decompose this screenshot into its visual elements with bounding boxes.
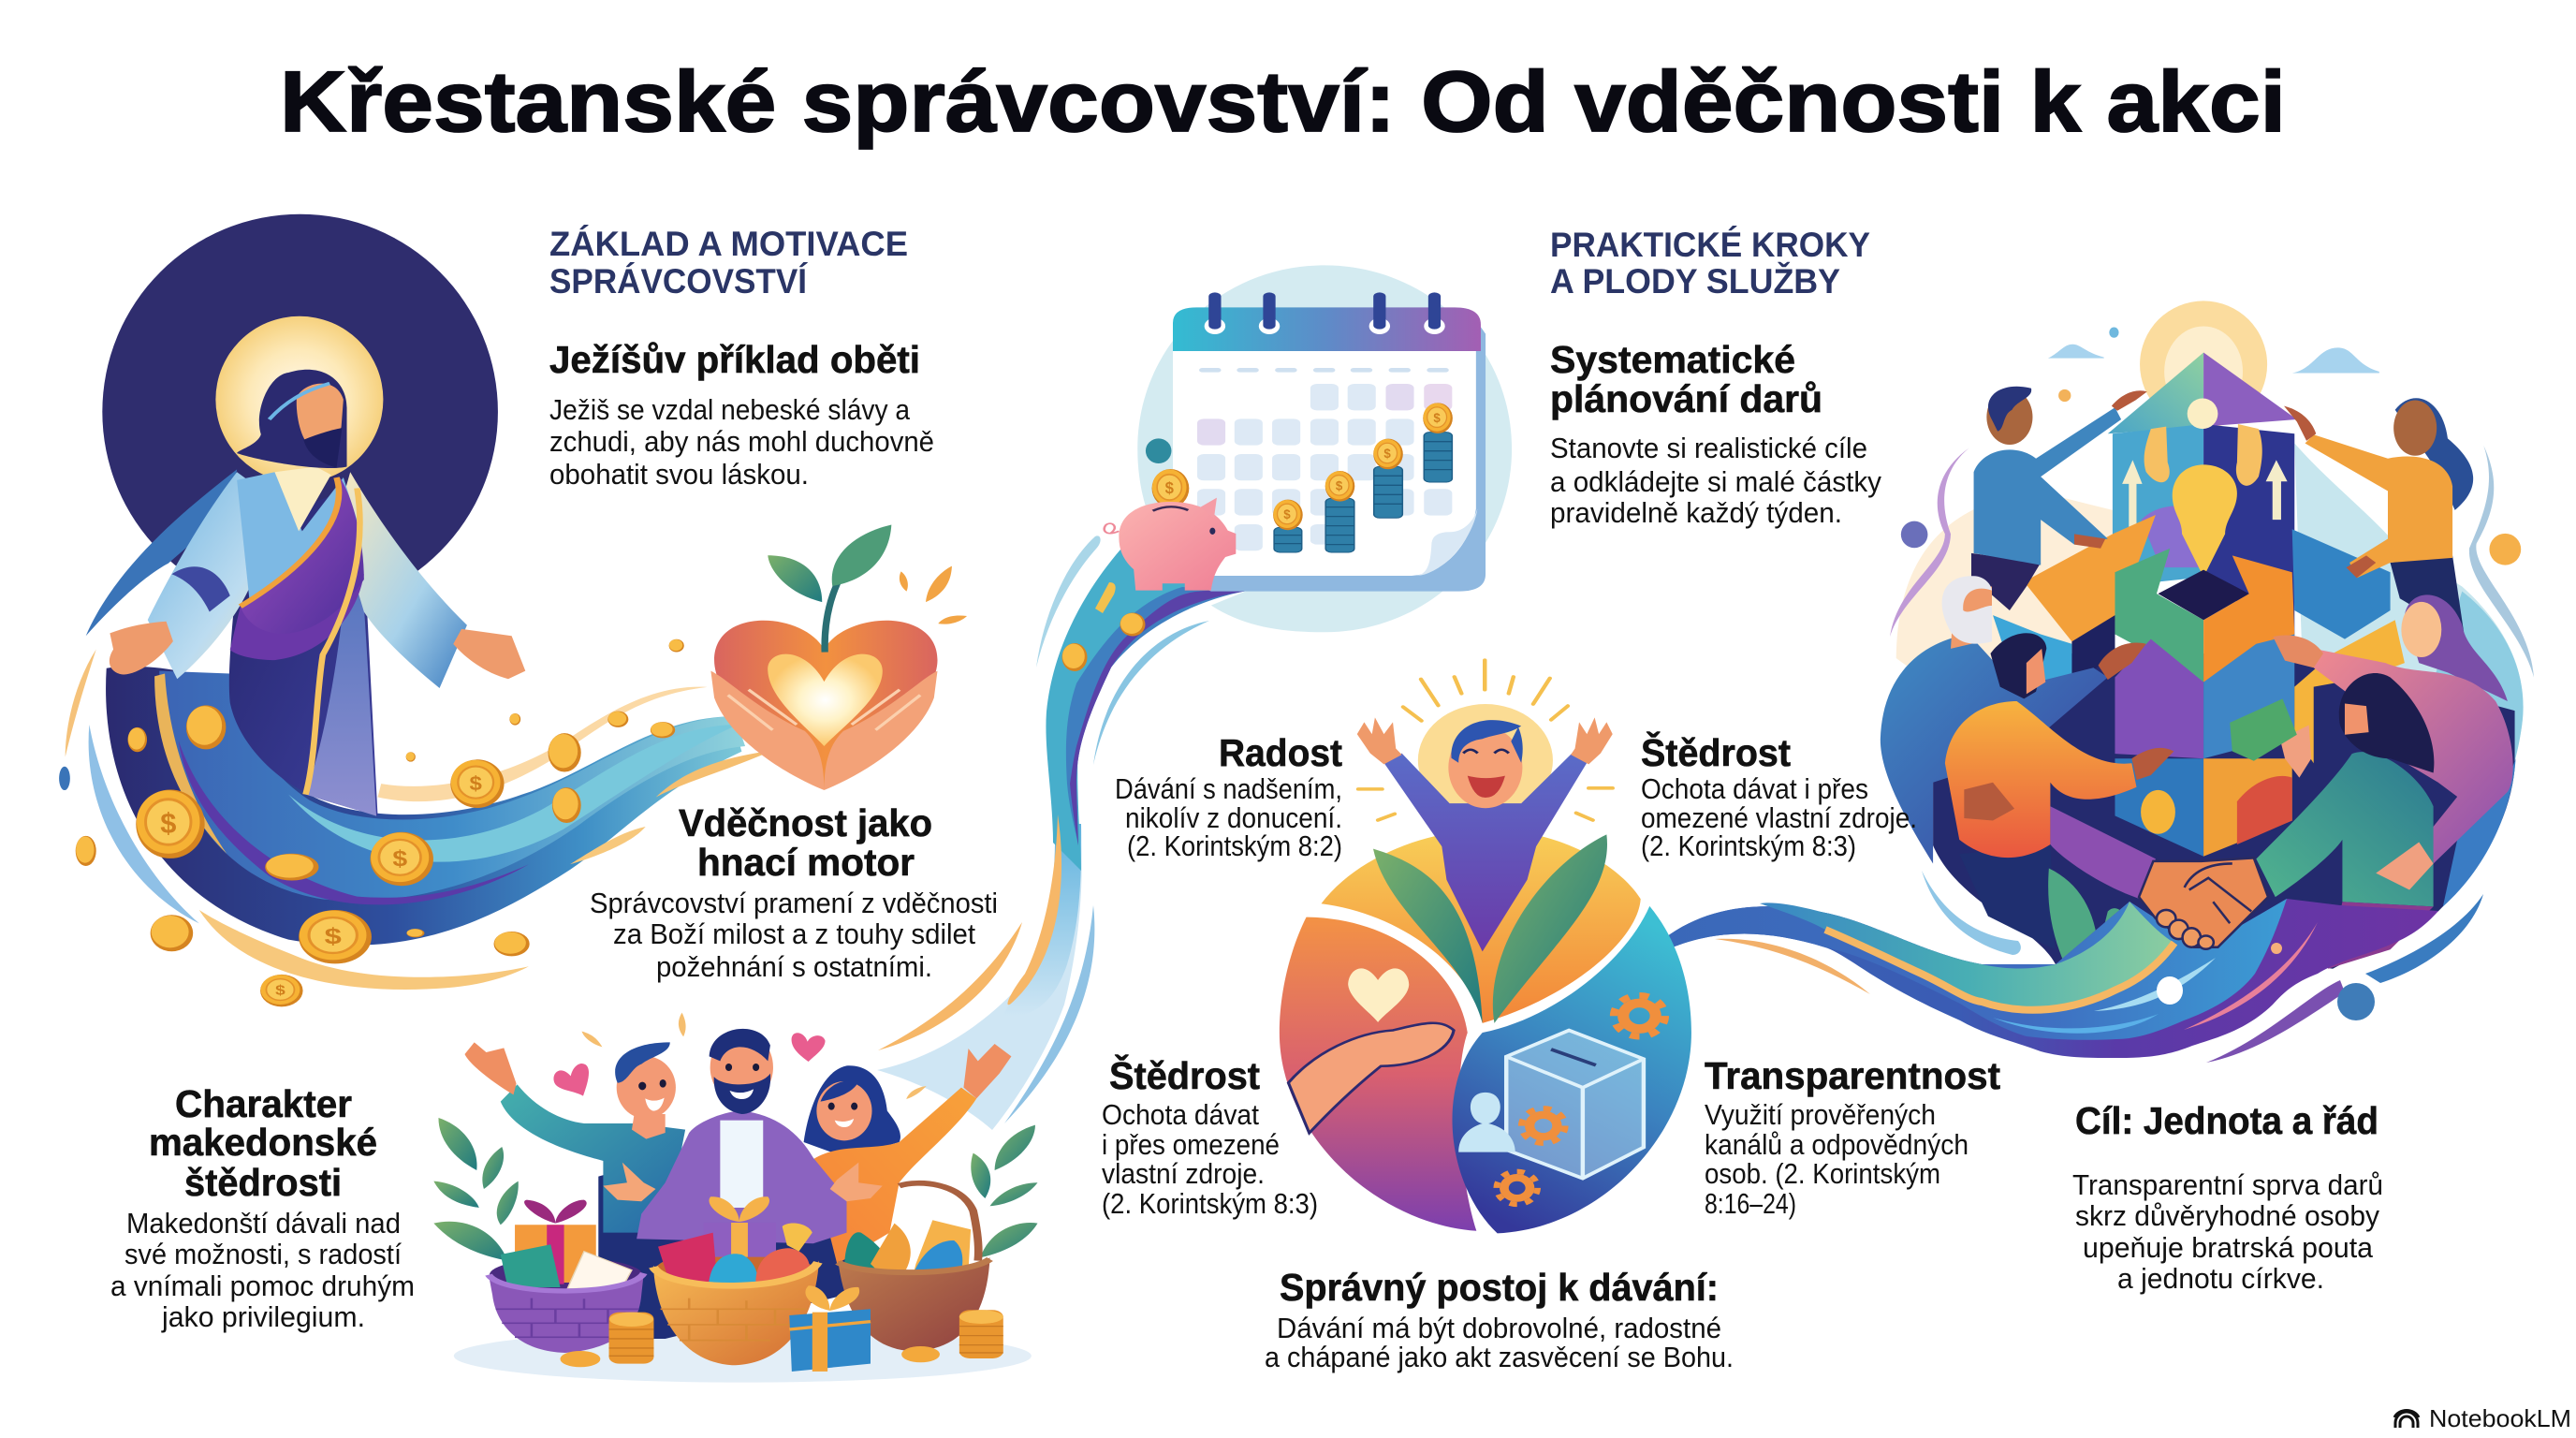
hands: [1357, 717, 1613, 764]
text: Radost: Dávání s nadšením,: [1115, 772, 1342, 805]
text: Charakter makedonské štědrosti: [110, 1082, 415, 1333]
pink streak: [2184, 922, 2318, 1030]
river purple band: [1070, 590, 1248, 845]
stack line details: [1274, 442, 1452, 545]
blue streak: [89, 725, 199, 923]
middle gifts: [658, 1196, 812, 1287]
blue right edge: [2443, 758, 2516, 906]
orange streak: [66, 650, 96, 756]
mouth: [1468, 776, 1505, 798]
river coin upper: [1120, 612, 1146, 637]
face: [297, 384, 344, 464]
left cupped hand: [710, 671, 824, 790]
text: section heading left: SPRÁVCOVSTVÍ: [549, 262, 809, 301]
small teal coin: [1146, 438, 1171, 463]
purple wave highlight: [179, 741, 529, 904]
open hand: [1288, 1023, 1454, 1133]
lower orange column: [2203, 758, 2292, 857]
small drop: [59, 767, 70, 790]
text: Vděčnost jako hnací motor: Správcovství pramení z vděčnosti: [590, 887, 998, 919]
person body: [1383, 754, 1587, 951]
illustration: central egg of attitudes: [1280, 660, 1691, 1233]
right basket gifts: [844, 1183, 978, 1273]
lower red block: [2237, 776, 2292, 844]
glass donation box: [1506, 1031, 1644, 1179]
calendar back page: [1173, 316, 1486, 592]
right basket rim: [838, 1259, 990, 1272]
left basket weave: [496, 1299, 639, 1337]
text: Cíl: Jednota a řád: Transparentní sprva darů: [2072, 1168, 2383, 1201]
finger lines: [728, 690, 920, 730]
left sleeve: [148, 472, 288, 679]
piggy bank: [1105, 498, 1236, 591]
coin stacks: [1274, 433, 1452, 552]
small decor: [2058, 389, 2071, 402]
person head: [1448, 727, 1522, 808]
text: Systematické plánování darů: Systematické: [1550, 338, 1795, 381]
blue block: [1993, 615, 2071, 687]
text: Správný postoj k dávání: Správný postoj k dávání:: [1280, 1266, 1719, 1309]
left basket gifts: [501, 1200, 632, 1289]
middle basket interior: [654, 1250, 814, 1294]
woman right: [804, 1044, 1011, 1264]
ground ellipse: [454, 1329, 1032, 1383]
text: Vděčnost jako hnací motor: požehnání s ostatními.: [656, 950, 932, 983]
hair highlight: [270, 384, 329, 419]
middle basket: [653, 1261, 819, 1365]
text: Štědrost right: omezené vlastní zdroje.: [1641, 801, 1917, 834]
teal backdrop lower: [2423, 592, 2524, 863]
eyes: [1463, 750, 1509, 754]
text: Cíl: Jednota a řád: skrz důvěryhodné osoby: [2075, 1199, 2379, 1232]
text: Charakter makedonské štědrosti: Makedonští dávali nad: [126, 1207, 401, 1240]
small orange dot: [2271, 943, 2282, 954]
blue cube face: [2203, 635, 2294, 758]
text: Transparentnost: osob. (2. Korintským: [1705, 1157, 1940, 1190]
left hand: [110, 622, 173, 674]
thin orange streak: [1715, 939, 1870, 994]
light heart: [1348, 968, 1409, 1022]
text: Charakter makedonské štědrosti: jako privilegium.: [161, 1300, 365, 1333]
text: Charakter makedonské štědrosti: své možnosti, s radostí: [124, 1238, 402, 1270]
text: Systematické plánování darů: pravidelně každý týden.: [1550, 496, 1842, 529]
text: Správný postoj k dávání: [1265, 1266, 1734, 1373]
tower glow: [2142, 506, 2203, 567]
connector teal-green layer: [1760, 902, 2174, 1010]
illustration: heart in hands with sprout: [710, 524, 967, 790]
clouds: [2048, 345, 2379, 373]
text: Vděčnost jako hnací motor: [590, 801, 998, 983]
calendar day cells: [1197, 384, 1452, 550]
text: Ježíšův příklad oběti: obohatit svou láskou.: [549, 458, 809, 491]
river outer lower streak: [1004, 905, 1094, 1123]
flowing navy wave: [106, 667, 741, 946]
inner heart: [768, 654, 883, 746]
text: Správný postoj k dávání: Dávání má být dobrovolné, radostné: [1277, 1312, 1721, 1344]
illustration: calendar with coin stacks and piggy bank: [1105, 265, 1512, 632]
text: Cíl: Jednota a řád: upeňuje bratrská pouta: [2083, 1231, 2374, 1264]
left plant: [433, 1118, 519, 1261]
stem: [825, 575, 842, 653]
gold ribbon right: [656, 751, 772, 797]
binder rings: [1205, 292, 1445, 334]
peach backdrop: [1896, 491, 2113, 711]
sash stripe: [241, 477, 339, 607]
central river ribbon: [877, 536, 1248, 1130]
calendar header: [1173, 307, 1481, 351]
right leaf: [1493, 834, 1607, 1023]
orange block side: [2071, 615, 2115, 687]
coin in column: [2141, 790, 2175, 834]
text: Vděčnost jako hnací motor: Vděčnost jako: [679, 801, 932, 844]
speech bubble left: [1901, 521, 1927, 548]
person top-right: [2284, 398, 2473, 637]
left basket: [489, 1273, 644, 1353]
sun halo: [1418, 704, 1553, 816]
petals: [900, 566, 967, 624]
orange puzzle piece: [2203, 555, 2294, 682]
person elder left: [1881, 576, 2146, 863]
connector orange line: [1825, 930, 2174, 1010]
calendar paper: [1173, 349, 1476, 576]
gold ribbon lower: [199, 910, 529, 990]
sleeve fold: [171, 566, 230, 611]
text: Transparentnost: Transparentnost: [1705, 1054, 2000, 1097]
purple forearm: [2050, 806, 2156, 900]
lower blue column: [2115, 758, 2203, 857]
text: Ježíšův příklad oběti: Ježiš se vzdal nebeské slávy a: [549, 393, 911, 426]
right cupped hand: [824, 671, 938, 790]
text: Štědrost left: vlastní zdroje.: [1102, 1157, 1265, 1190]
dark lower bodies: [598, 1158, 846, 1339]
text: Charakter makedonské štědrosti: makedonské: [149, 1121, 377, 1164]
roof right: [2203, 353, 2297, 427]
orange strip in river: [1007, 814, 1061, 1005]
person icon: [1458, 1093, 1515, 1152]
text: Transparentnost: 8:16–24): [1705, 1187, 1796, 1220]
text: section heading right: PRAKTICKÉ KROKY: [1550, 226, 1870, 264]
connector purple outer: [1634, 899, 2438, 1058]
connector blue layer: [1634, 899, 2287, 1040]
sun: [2140, 301, 2267, 428]
blue highlight: [1993, 1014, 2159, 1034]
left basket interior: [490, 1257, 642, 1292]
text: Systematické plánování darů: Stanovte si realistické cíle: [1550, 432, 1867, 464]
pale circle backdrop: [1137, 265, 1512, 632]
text: Systematické plánování darů: [1550, 338, 1881, 529]
person top-left: [1971, 387, 2147, 610]
cyan layer of wave: [288, 725, 739, 862]
text: Transparentnost: kanálů a odpovědných: [1705, 1128, 1969, 1161]
text: Cíl: Jednota a řád: Cíl: Jednota a řád: [2075, 1099, 2378, 1142]
blue cape streak: [86, 469, 237, 636]
text: Ježíšův příklad oběti: Ježíšův příklad oběti: [549, 338, 920, 381]
arrows: [2122, 460, 2288, 529]
tower right: [2203, 424, 2294, 644]
gears: [1497, 995, 1665, 1204]
text: Transparentnost: [1705, 1054, 2000, 1220]
left leaf: [1373, 849, 1483, 1023]
light streak: [1922, 871, 2021, 955]
right sleeve: [337, 472, 467, 688]
text: Správný postoj k dávání: a chápané jako akt zasvěcení se Bohu.: [1265, 1341, 1734, 1373]
purple cube face: [2115, 639, 2203, 758]
right hand: [453, 629, 525, 679]
plant: [2048, 869, 2131, 964]
halo: [215, 316, 383, 483]
text: Štědrost left: Ochota dávat: [1102, 1098, 1259, 1131]
blue gift box: [789, 1285, 871, 1372]
river mid blue: [1003, 824, 1081, 1017]
weekday dashes: [1199, 368, 1449, 373]
green puzzle piece: [2115, 549, 2203, 682]
mid blue layer of wave: [159, 671, 745, 901]
thumb: [2185, 863, 2251, 923]
page curl: [1416, 508, 1477, 576]
icon: NotebookLM logo: [2394, 1410, 2419, 1428]
text: Štědrost left: [1102, 1054, 1318, 1220]
beard: [303, 428, 342, 468]
right plant: [971, 1125, 1037, 1257]
text: Ježíšův příklad oběti: zchudi, aby nás mohl duchovně: [549, 425, 934, 458]
coin stacks: [560, 1310, 1003, 1367]
left basket rim and bricks: [489, 1273, 644, 1291]
text: Štědrost left: Štědrost: [1109, 1054, 1260, 1097]
man left: [464, 1042, 685, 1233]
orb: [2188, 399, 2217, 429]
bulb: [2173, 464, 2237, 577]
pale teal backdrop: [2294, 443, 2524, 873]
person pink: [2273, 594, 2513, 863]
river teal band: [1046, 550, 1248, 871]
text: Radost: [1115, 731, 1342, 862]
river outer left streak: [1036, 536, 1101, 668]
text: Systematické plánování darů: a odkládejte si malé částky: [1550, 465, 1881, 498]
right edge streak: [2365, 894, 2483, 983]
text: Systematické plánování darů: plánování darů: [1550, 377, 1822, 420]
text: section heading left: ZÁKLAD A MOTIVACE: [549, 225, 908, 263]
title: Křestanské správcovství: Od vděčnosti k akci: [280, 54, 2286, 150]
hair: [237, 370, 347, 468]
right blue block: [2292, 529, 2391, 639]
text: Štědrost left: i přes omezené: [1102, 1128, 1280, 1161]
text: Cíl: Jednota a řád: a jednotu církve.: [2117, 1262, 2324, 1295]
text: Štědrost right: Ochota dávat i přes: [1641, 772, 1868, 805]
text: Štědrost right: Štědrost: [1641, 731, 1791, 774]
text: Charakter makedonské štědrosti: Charakter: [175, 1082, 352, 1125]
tower left: [2113, 424, 2203, 587]
left segment: [1280, 917, 1476, 1231]
roof left: [2108, 353, 2203, 433]
swirl left: [1890, 448, 1969, 637]
middle basket rim: [653, 1262, 818, 1285]
top orange segment: [1321, 829, 1641, 1023]
text: Radost: (2. Korintským 8:2): [1127, 829, 1342, 862]
river coin gold dash: [1095, 582, 1116, 613]
river coin: [1061, 643, 1088, 671]
illustration: generous people with baskets: [433, 1013, 1038, 1383]
dark navy circle behind figure: [102, 214, 498, 609]
orange coins on stacks: [1152, 403, 1453, 530]
text: Charakter makedonské štědrosti: a vnímali pomoc druhým: [110, 1269, 415, 1302]
sun core: [2164, 326, 2243, 417]
purple sash: [241, 477, 364, 634]
navy base mass: [1933, 653, 2515, 969]
decorative dots: [581, 1013, 927, 1099]
text: Cíl: Jednota a řád: [2072, 1099, 2383, 1295]
money: [2230, 698, 2297, 761]
text: Ježíšův příklad oběti: [549, 338, 934, 491]
right basket: [838, 1257, 990, 1351]
left leaf: [768, 555, 822, 602]
person teal: [2256, 673, 2434, 969]
middle basket weave: [661, 1299, 806, 1341]
robe column: [305, 488, 376, 816]
wrench hands: [2144, 424, 2262, 486]
chest robe: [237, 472, 358, 611]
person hair: [1451, 720, 1523, 763]
river inner right streak: [1093, 621, 1209, 765]
hands: [2139, 858, 2268, 947]
text: Štědrost left: (2. Korintským 8:3): [1102, 1187, 1318, 1220]
white dot: [2157, 976, 2183, 1005]
connector wave to right illustration: [1634, 871, 2483, 1063]
river blue band: [1066, 587, 1248, 845]
ball tail: [2206, 980, 2345, 1063]
orange block: [2024, 515, 2156, 641]
text: Transparentnost: Využití prověřených: [1705, 1098, 1936, 1131]
center man: [603, 1029, 883, 1243]
text: Radost: Radost: [1219, 731, 1342, 774]
pale highlight: [2094, 958, 2216, 1011]
thin orange arc: [878, 922, 1022, 1050]
fingers: [2157, 910, 2214, 949]
gold stripe in wave: [154, 673, 227, 854]
right yellow block: [2294, 620, 2405, 763]
right leaf: [832, 524, 891, 586]
river pale body: [877, 843, 1082, 1130]
sash gold edge: [305, 488, 359, 795]
text: section heading left: [549, 225, 908, 301]
person orange shirt: [1945, 633, 2174, 949]
heart: [714, 621, 938, 789]
figure lower robe: [229, 488, 378, 816]
hearts: [553, 1033, 826, 1096]
illustration: people building together: [1881, 301, 2534, 969]
text: Štědrost right: (2. Korintským 8:3): [1641, 829, 1856, 862]
right segment: [1452, 906, 1691, 1233]
text: section heading right: [1550, 226, 1870, 301]
purple fold: [230, 574, 364, 660]
text: Vděčnost jako hnací motor: za Boží milost a z touhy sdilet: [613, 917, 975, 950]
gold ribbon near text: [570, 827, 646, 864]
cream collar: [274, 466, 331, 531]
coins: [76, 639, 684, 1006]
illustration: handshake: [2139, 858, 2268, 949]
text: Radost: nikolív z donucení.: [1125, 801, 1342, 834]
drop decor: [2109, 327, 2119, 338]
blue dot: [2337, 983, 2375, 1020]
text: Vděčnost jako hnací motor: hnací motor: [697, 841, 915, 884]
dark diamond opening: [2158, 570, 2249, 620]
rays: [1358, 660, 1613, 820]
text: section heading right: A PLODY SLUŽBY: [1550, 261, 1840, 301]
gold ribbons: [378, 687, 708, 801]
speech bubble right: [2489, 534, 2521, 565]
text: Charakter makedonské štědrosti: štědrosti: [184, 1161, 342, 1204]
text: Štědrost right: [1641, 731, 1917, 862]
swirl right: [2469, 446, 2534, 677]
text: NotebookLM: NotebookLM: [2429, 1404, 2571, 1432]
illustration: Jesus with flowing robe and coins: [59, 214, 772, 1006]
